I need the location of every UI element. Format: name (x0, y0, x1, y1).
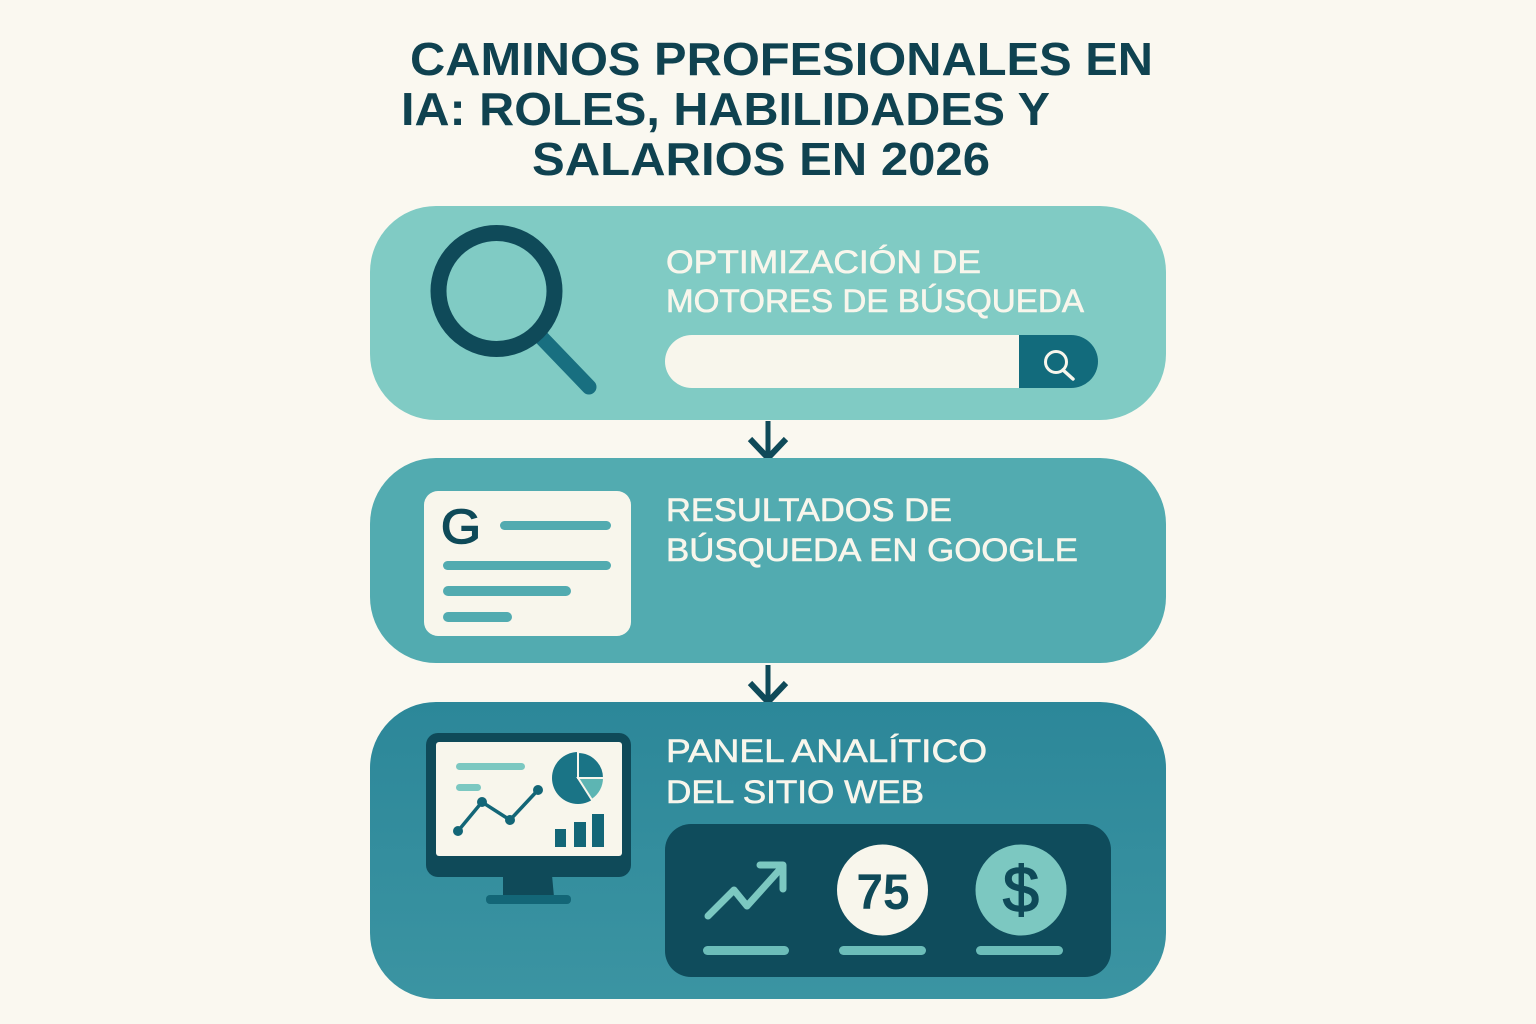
pie chart (552, 752, 604, 804)
icon: google g: G (441, 501, 481, 554)
bar chart (555, 814, 604, 847)
heading: optimización (666, 244, 1085, 319)
title: IA: ROLES, HABILIDADES Y (401, 83, 1050, 135)
metric: score 75: 75 (856, 864, 910, 920)
arrow: step 1 to step 2 (750, 421, 786, 458)
heading: panel analítico (666, 733, 987, 810)
results card (424, 491, 631, 636)
metric: dollar (976, 844, 1066, 936)
heading: optimización: OPTIMIZACIÓN DE (666, 244, 981, 280)
title: SALARIOS EN 2026 (532, 133, 990, 185)
arrow: step 2 to step 3 (750, 665, 786, 702)
heading: optimización: MOTORES DE BÚSQUEDA (666, 283, 1085, 319)
heading: resultados: BÚSQUEDA EN GOOGLE (666, 532, 1078, 568)
heading: panel analítico: DEL SITIO WEB (666, 774, 924, 810)
search bar (665, 335, 1098, 388)
heading: resultados (666, 492, 1078, 568)
icon: search button (1046, 352, 1073, 379)
line chart (453, 785, 543, 836)
heading: panel analítico: PANEL ANALÍTICO (666, 733, 987, 769)
icon: growth arrow (708, 865, 783, 916)
panel: resultados de búsqueda en google (370, 458, 1166, 663)
metric: score 75 (837, 844, 928, 936)
panel: panel analítico del sitio web (370, 702, 1166, 999)
heading: resultados: RESULTADOS DE (666, 492, 952, 528)
icon: magnifying glass (438, 233, 589, 387)
metric: dollar: $ (1003, 853, 1039, 926)
panel: optimización de motores de búsqueda (370, 206, 1166, 420)
title: CAMINOS PROFESIONALES EN (410, 33, 1153, 85)
metrics box (665, 824, 1111, 977)
icon: monitor dashboard (426, 733, 631, 904)
title (401, 33, 1153, 185)
